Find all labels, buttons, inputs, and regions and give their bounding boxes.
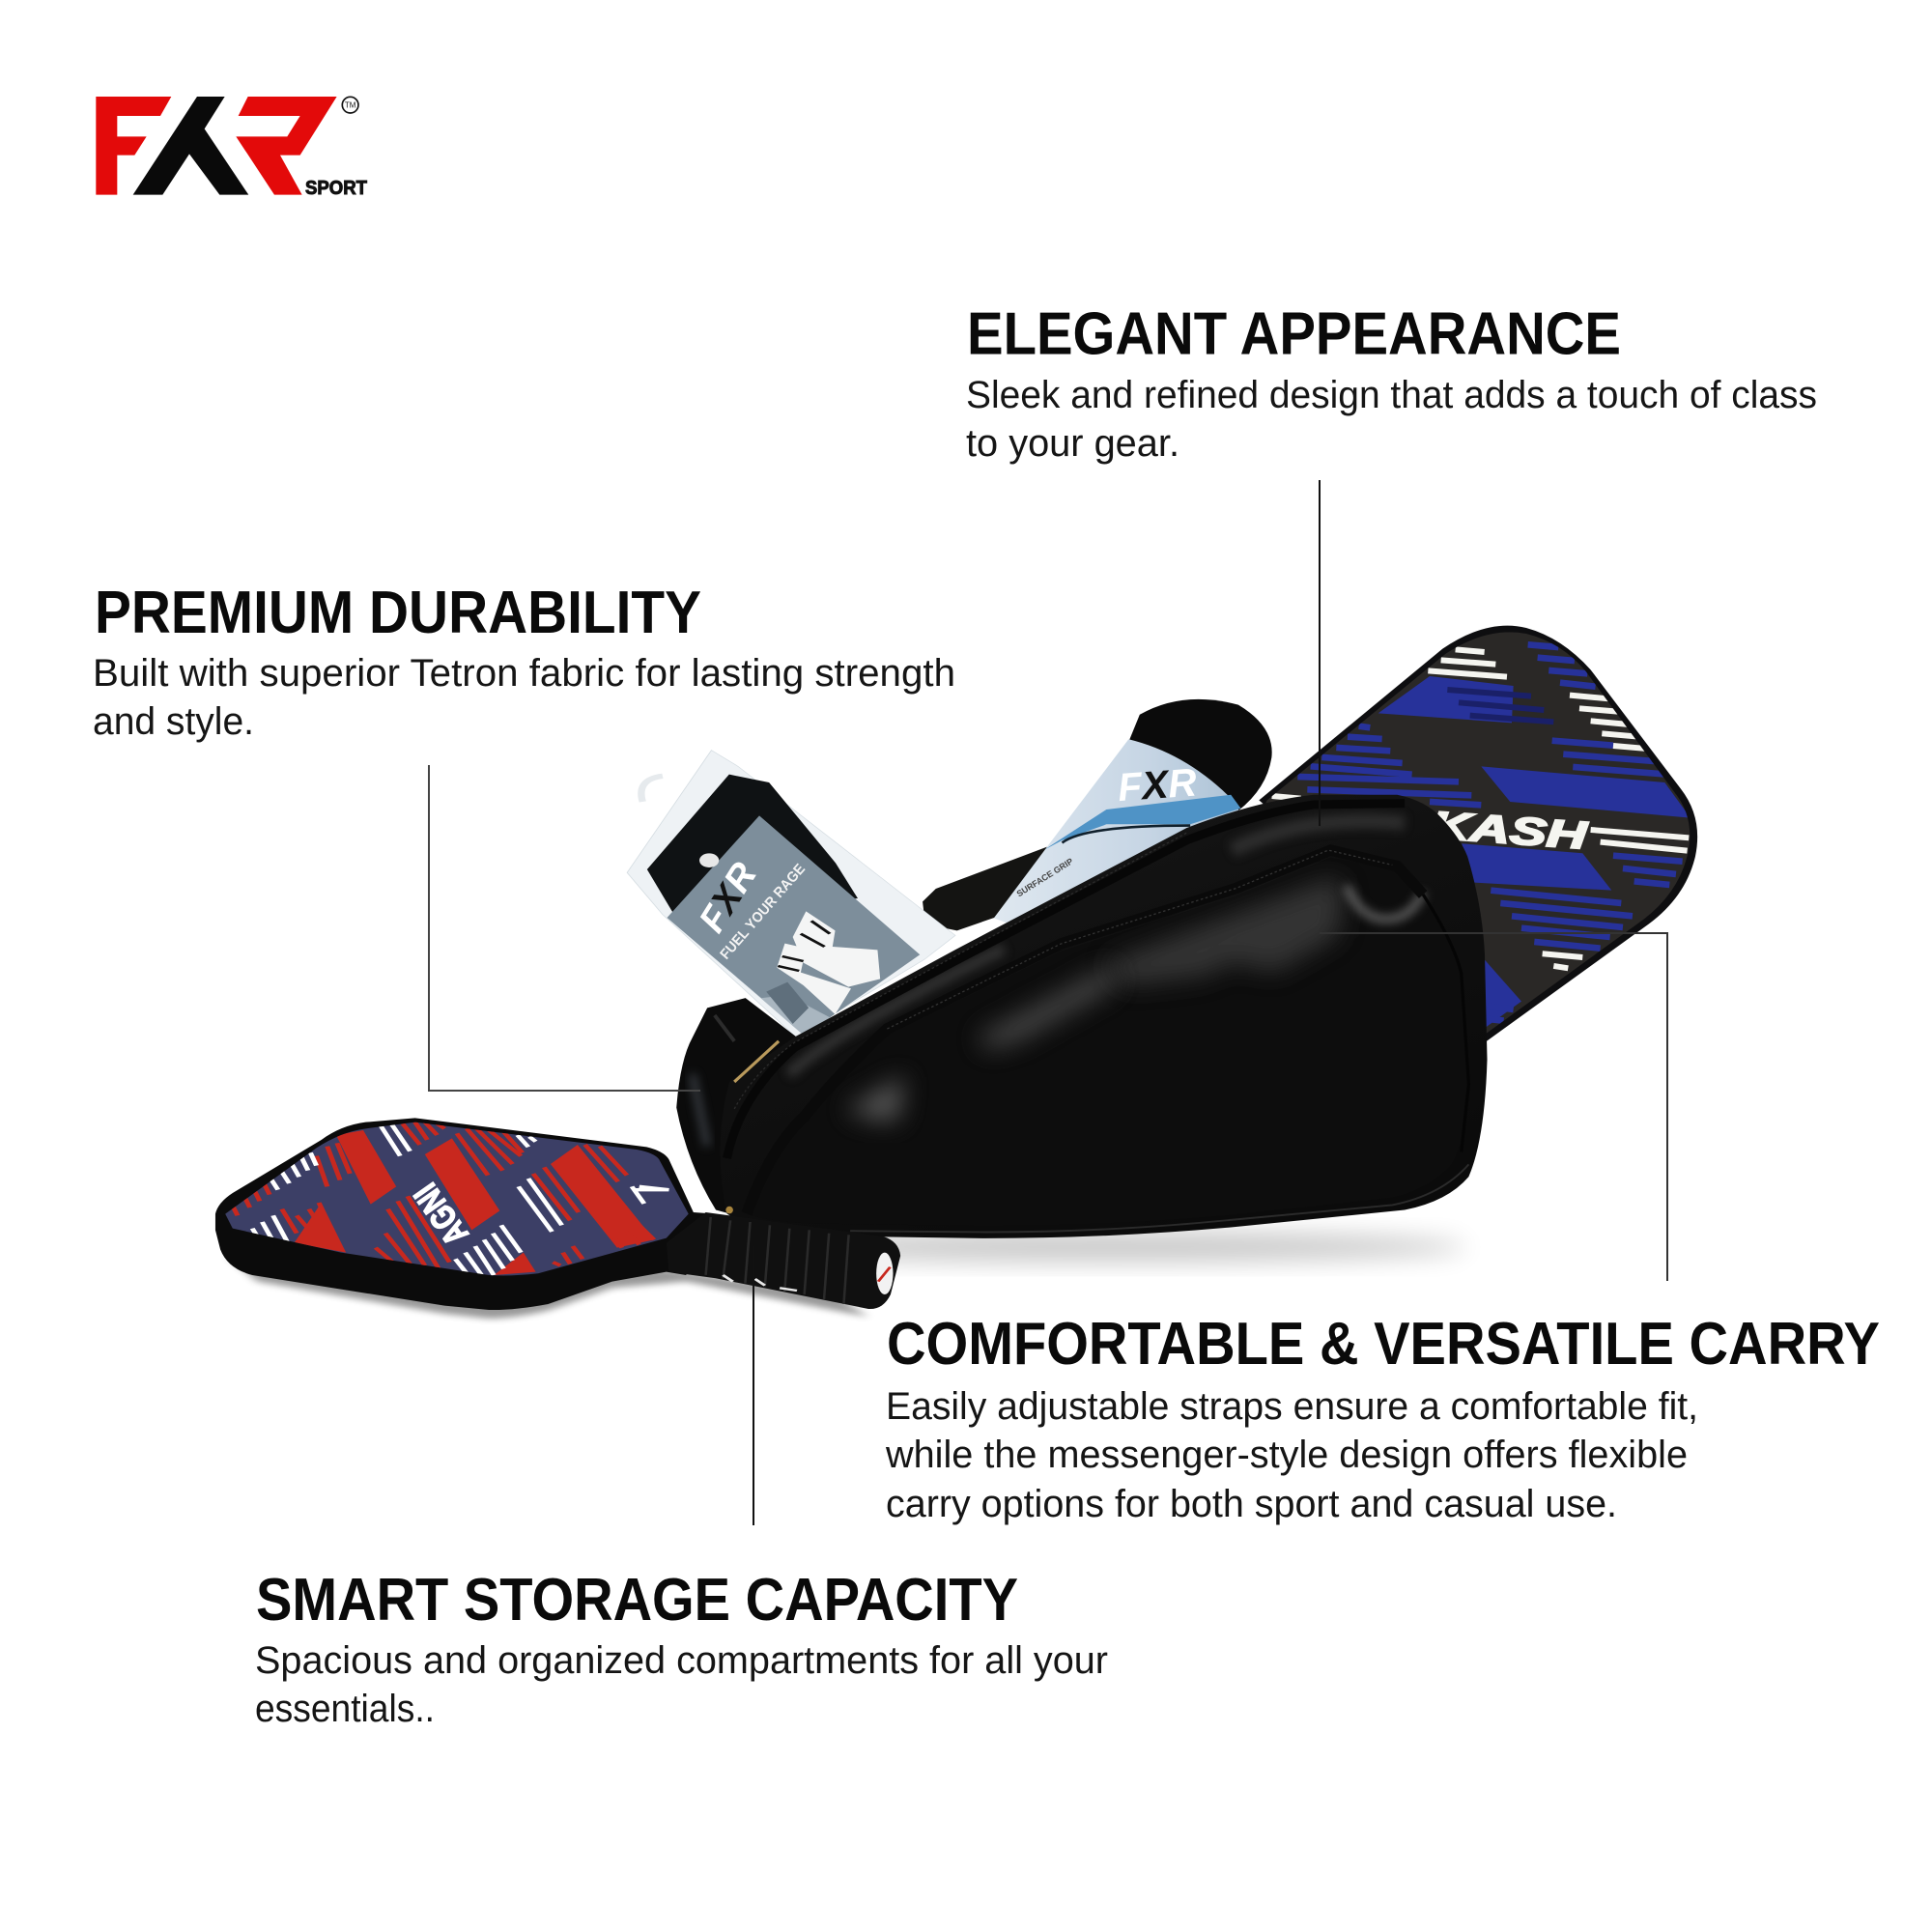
paddle name: KASH (1429, 804, 1589, 858)
bag outer shell (720, 795, 1488, 1238)
logo: FXR Sport (96, 97, 367, 199)
paddle shadow (228, 1256, 868, 1319)
blue band (1043, 795, 1240, 850)
leader line: comfortable carry (1320, 933, 1667, 1281)
card (668, 815, 920, 1036)
tagline: FUEL YOUR RAGE (717, 861, 809, 963)
heading and text: comfortable carry (885, 1311, 1880, 1525)
clear bag (627, 751, 955, 1037)
right seam (1423, 895, 1468, 1152)
zipper pull (734, 1041, 779, 1082)
heading and text: premium durability: PREMIUM DURABILITY (95, 580, 701, 646)
red paddle: AGNI (193, 1111, 900, 1319)
leader line: elegant appearance (1319, 480, 1321, 826)
paddle frame (215, 1118, 716, 1310)
bottle: ball tube: SURFACE GRIP (1015, 856, 1075, 898)
main zipper (727, 804, 1405, 1158)
heading and text: smart storage: Spacious and organized compartments for all your (255, 1639, 1108, 1682)
heading and text: premium durability: Built with superior Tetron fabric for lasting strength (93, 652, 955, 695)
front panel (747, 858, 1468, 1226)
logo: FXR Sport: SPORT (305, 178, 367, 199)
heading and text: elegant appearance: to your gear. (966, 422, 1179, 465)
heading and text: comfortable carry: while the messenger-style design offers flexible (885, 1434, 1688, 1476)
heading and text: elegant appearance (966, 301, 1817, 465)
bottom seam (850, 1164, 1468, 1233)
tube body (993, 739, 1251, 924)
camouflage and white socks (729, 911, 880, 1036)
paddle face (225, 1122, 689, 1275)
handle grip (667, 1212, 900, 1309)
heading and text: elegant appearance: ELEGANT APPEARANCE (967, 301, 1621, 367)
heading and text: smart storage: essentials.. (255, 1688, 435, 1730)
ground shadow (752, 1233, 1466, 1262)
small mark (632, 1186, 668, 1204)
side pocket (676, 998, 797, 1213)
socks package (627, 751, 955, 1037)
leader line: premium durability (429, 765, 700, 1091)
back strap (923, 847, 1047, 930)
pocket zipper (747, 850, 1423, 1213)
heading and text: smart storage (255, 1567, 1108, 1730)
end cap (876, 1253, 893, 1294)
heading and text: comfortable carry: Easily adjustable straps ensure a comfortable fit, (886, 1385, 1698, 1428)
bottle: ball tube (993, 699, 1272, 924)
blue paddle: KASH (1259, 626, 1698, 1041)
bag: black messenger bag (676, 795, 1488, 1262)
leader line: smart storage (753, 1246, 754, 1525)
upper strip sheen (1233, 821, 1405, 850)
logo: FXR Sport: TM (345, 101, 355, 110)
heading and text: elegant appearance: Sleek and refined design that adds a touch of class (966, 374, 1817, 416)
card logo: FXR (692, 856, 765, 940)
heading and text: comfortable carry: carry options for both sport and casual use. (886, 1483, 1617, 1525)
panel highlights (1105, 877, 1345, 985)
tube logo: FXR (1117, 759, 1199, 810)
paddle name: AGNI (406, 1177, 476, 1253)
sock (647, 775, 858, 918)
heading and text: premium durability: and style. (93, 700, 254, 743)
heading and text: premium durability (93, 580, 955, 743)
tube cap (1128, 699, 1272, 810)
heading and text: smart storage: SMART STORAGE CAPACITY (256, 1567, 1018, 1634)
